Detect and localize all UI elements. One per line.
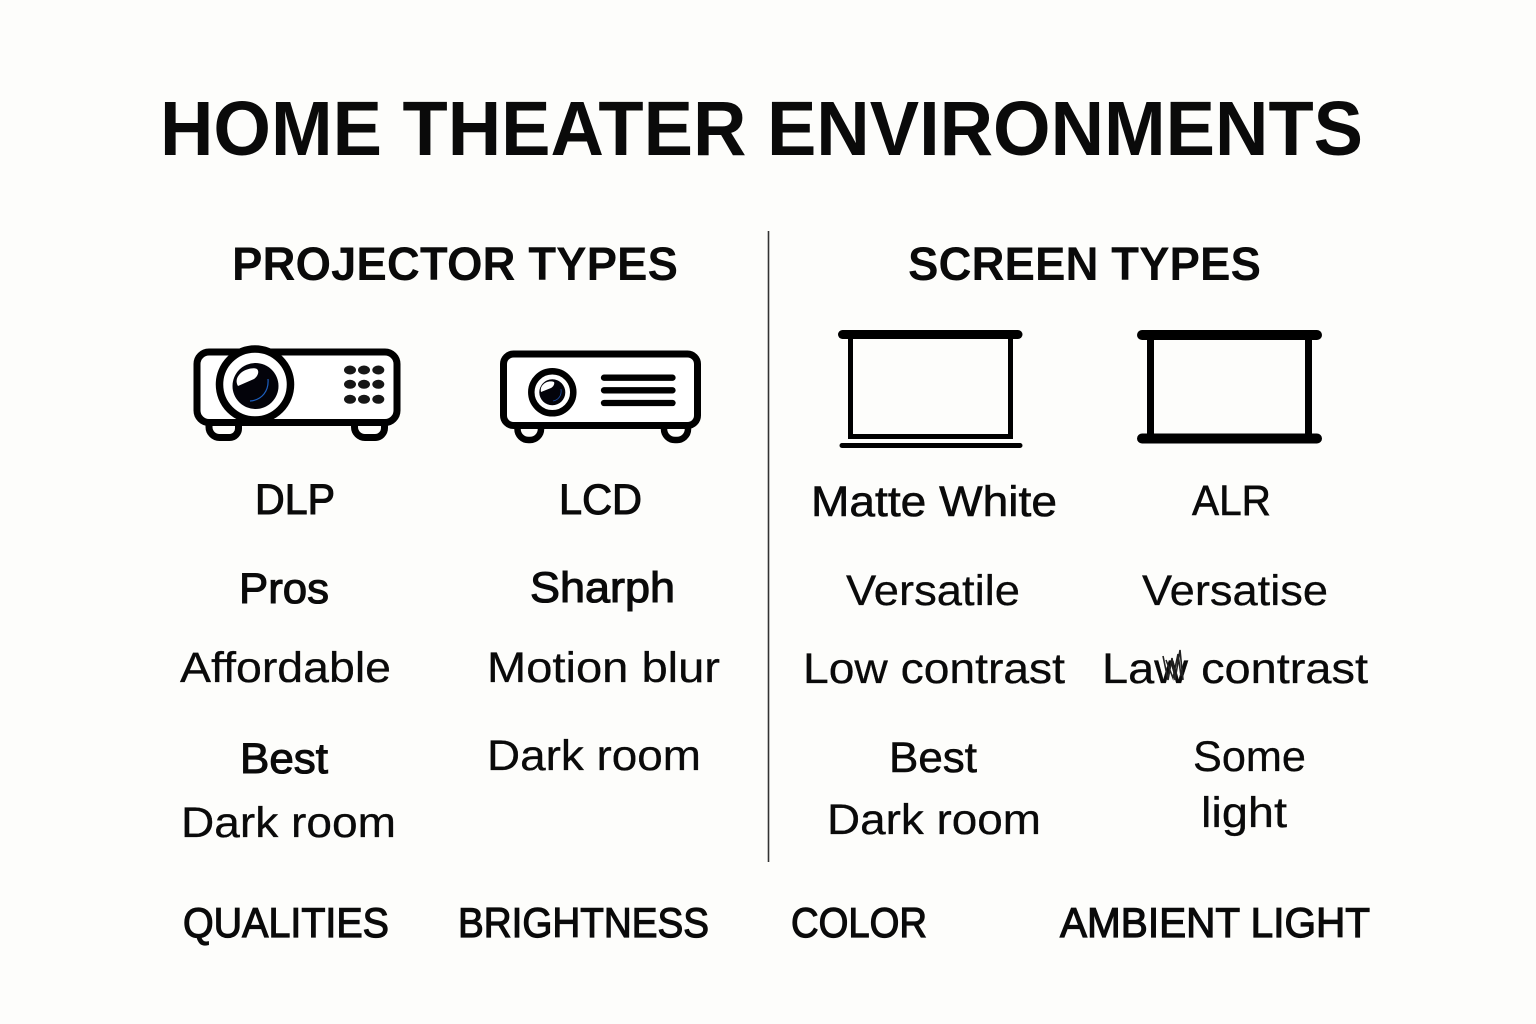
center divider [768,231,770,862]
icon: ALR screen [1142,335,1317,438]
text: Dark room (DLP): Dark room [181,799,396,847]
heading: projector types: PROJECTOR TYPES [232,237,678,290]
text: Sharph: Sharph [530,564,675,612]
text: Best (matte white): Best [889,734,977,782]
text: Affordable: Affordable [180,644,391,692]
text: Motion blur: Motion blur [487,644,720,692]
title: HOME THEATER ENVIRONMENTS [160,86,1363,172]
text: Versatile: Versatile [846,567,1020,615]
text: Dark room (LCD): Dark room [487,732,701,780]
footer labels [183,899,1370,946]
text: Low contrast: Low contrast [803,645,1065,693]
footer: brightness: BRIGHTNESS [458,899,709,946]
label: ALR: ALR [1192,477,1271,525]
text: Pros: Pros [239,565,329,613]
panel: screen types [803,334,1368,844]
label: DLP: DLP [255,476,335,524]
footer: qualities: QUALITIES [183,899,389,946]
heading: screen types: SCREEN TYPES [908,237,1261,290]
text: Law contrast: Law contrast [1102,645,1368,693]
label: Matte White: Matte White [811,478,1057,526]
text: Best (DLP): Best [240,735,328,783]
text: Dark room (matte white): Dark room [827,796,1041,844]
icon: matte white screen [842,334,1020,446]
text: light: light [1201,789,1287,837]
footer: ambient light: AMBIENT LIGHT [1060,899,1370,946]
footer: color: COLOR [791,899,927,946]
panel: projector types [180,349,720,847]
icon: DLP projector [197,349,397,438]
label: LCD: LCD [559,476,642,524]
text: Versatise: Versatise [1142,567,1328,615]
text: Some: Some [1193,733,1306,781]
icon: LCD projector [504,354,698,440]
